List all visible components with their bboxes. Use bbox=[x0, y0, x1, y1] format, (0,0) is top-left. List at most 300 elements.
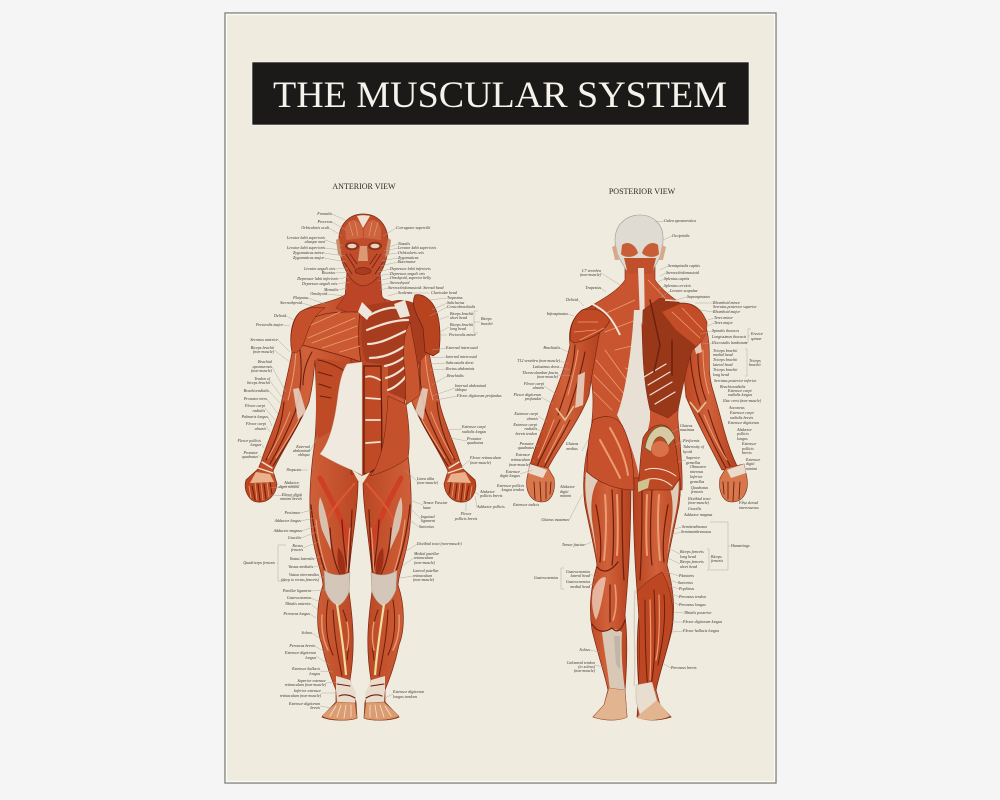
labels: anterior left: Peroneus brevis bbox=[288, 643, 315, 648]
labels: posterior left: Gastrocnemius bbox=[566, 569, 590, 574]
labels: anterior left: retinaculum (non-muscle) bbox=[280, 693, 322, 698]
labels: anterior right: pollicis brevis bbox=[479, 493, 503, 498]
labels: anterior right bbox=[388, 225, 505, 699]
abdominal tendon stripes bbox=[366, 376, 380, 443]
labels: anterior right: (non-muscle) bbox=[470, 460, 492, 465]
left shoulder deltoid bbox=[291, 307, 325, 353]
heading: posterior view: POSTERIOR VIEW bbox=[609, 187, 676, 196]
labels: anterior right: Subcostalis dorsi bbox=[446, 360, 473, 365]
labels: posterior right: brachii bbox=[749, 362, 761, 367]
labels: anterior left: Levator labii superioris bbox=[286, 235, 325, 240]
labels: anterior left: Frontalis bbox=[316, 211, 332, 216]
labels: posterior left: Gluteus bbox=[566, 441, 579, 446]
poster panel bbox=[225, 13, 776, 783]
leader lines bbox=[258, 214, 470, 470]
labels: posterior right bbox=[664, 218, 764, 670]
labels: anterior left: minimi brevis bbox=[280, 496, 302, 501]
labels: posterior right: First dorsal bbox=[738, 500, 759, 505]
labels: anterior left: Extensor digitorum bbox=[284, 650, 316, 655]
labels: posterior right: Adductor magnus bbox=[683, 512, 713, 517]
labels: posterior left: medial head bbox=[570, 584, 591, 589]
labels: posterior right: Occipitalis bbox=[672, 233, 690, 238]
labels: anterior right: Orbicularis oris bbox=[398, 250, 424, 255]
labels: anterior left: femoris bbox=[291, 547, 303, 552]
labels: posterior right: Teres minor bbox=[714, 315, 733, 320]
left arm bbox=[530, 305, 600, 468]
labels: posterior right: radialis longus bbox=[728, 392, 753, 397]
labels: anterior left: Quadriceps femoris bbox=[243, 560, 275, 565]
labels: posterior left: (non-muscle) bbox=[574, 668, 596, 673]
labels: posterior right: Extensor carpi bbox=[727, 388, 752, 393]
labels: posterior left: Extensor indicis bbox=[512, 502, 539, 507]
labels: anterior right: Inguinal bbox=[420, 514, 435, 519]
labels: anterior right: Internal intercostal bbox=[445, 354, 478, 359]
labels: anterior left: Pronator teres bbox=[243, 396, 267, 401]
labels: anterior right: Tensor Fasciae bbox=[423, 500, 448, 505]
labels: posterior right: Longissimus thoracis bbox=[711, 334, 747, 339]
labels: posterior right: Triceps brachii bbox=[713, 357, 737, 362]
labels: anterior right: Sartorius bbox=[419, 524, 434, 529]
labels: anterior left: biceps brachii bbox=[247, 380, 270, 385]
labels: anterior left: longus bbox=[250, 442, 261, 447]
labels: posterior right: Semimembranosus bbox=[681, 529, 711, 534]
labels: anterior left: Gracilis bbox=[288, 535, 301, 540]
labels: anterior right: External intercostal bbox=[445, 345, 479, 350]
groin shadow bbox=[352, 470, 370, 486]
labels: posterior right: Iliocostalis lumborum bbox=[711, 340, 747, 345]
labels: anterior left: retinaculum (non-muscle) bbox=[285, 682, 327, 687]
labels: anterior right: Depressor labii inferioris bbox=[389, 266, 431, 271]
labels: posterior left: brevis tendon bbox=[515, 431, 537, 436]
labels: anterior left: Brachioradialis bbox=[244, 388, 269, 393]
labels: anterior left: oblique bbox=[298, 452, 310, 457]
labels: posterior right: Inferior bbox=[689, 474, 703, 479]
labels: posterior right: pollicis bbox=[741, 446, 754, 451]
left rib and serratus muscles bbox=[316, 358, 362, 440]
labels: posterior right: Biceps femoris bbox=[680, 549, 704, 554]
labels: posterior left: longus tendon bbox=[501, 487, 524, 492]
labels: posterior right: Obturator bbox=[690, 464, 707, 469]
labels: anterior left: Pectoralis major bbox=[255, 322, 283, 327]
labels: posterior left: Deltoid bbox=[565, 297, 579, 302]
labels: posterior right: Extensor carpi bbox=[729, 410, 754, 415]
labels: posterior right: Galea aponeurotica bbox=[664, 218, 696, 223]
labels: anterior right: Iliotibial tract (non-muscle) bbox=[416, 541, 462, 546]
labels: posterior right: long head bbox=[680, 554, 697, 559]
labels: posterior left: Tensor fasciae bbox=[562, 542, 585, 547]
labels: posterior right: Splenius cervicis bbox=[664, 283, 691, 288]
labels: posterior right: Plantaris bbox=[678, 573, 694, 578]
labels: anterior left: radialis bbox=[253, 408, 265, 413]
labels: anterior left: aponeurosis bbox=[253, 364, 272, 369]
labels: anterior left: Inferior extensor bbox=[293, 688, 321, 693]
labels: posterior left: Latissimus dorsi bbox=[532, 364, 559, 369]
labels: posterior right: Superior bbox=[686, 455, 700, 460]
labels: anterior right: Corrugator supercilii bbox=[396, 225, 430, 230]
labels: anterior left: Flexor pollicis bbox=[237, 438, 261, 443]
labels: anterior left: Depressor labii inferioris bbox=[296, 276, 338, 281]
labels: posterior right: maximus bbox=[680, 427, 695, 432]
labels: anterior right: Rectus abdominis bbox=[445, 366, 475, 371]
labels: anterior left: Brachial bbox=[258, 359, 273, 364]
right back deep muscles bbox=[642, 298, 707, 418]
labels: anterior right: Clavicular head bbox=[431, 290, 458, 295]
labels: posterior right: Brachioradialis bbox=[720, 384, 746, 389]
labels: anterior right: pollicis brevis bbox=[454, 516, 478, 521]
labels: posterior right: Quadratus bbox=[691, 485, 709, 490]
labels: posterior left: ulnaris bbox=[527, 416, 538, 421]
labels: posterior right: Rhomboid major bbox=[712, 309, 740, 314]
labels: anterior left: Orbicularis oculi bbox=[301, 225, 329, 230]
right arm bbox=[680, 310, 738, 470]
labels: anterior left: (deep to rectus femoris) bbox=[281, 577, 320, 582]
labels: anterior left: longus bbox=[309, 671, 320, 676]
labels: posterior left: (non-muscle) bbox=[580, 272, 602, 277]
labels: posterior right: Extensor digitorum bbox=[727, 420, 759, 425]
labels: posterior left: Soleus bbox=[580, 647, 590, 652]
labels: anterior left: Serratus anterior bbox=[250, 337, 278, 342]
labels: posterior right: Tuberosity of bbox=[683, 444, 705, 449]
labels: anterior left: Palmaris longus bbox=[241, 414, 268, 419]
labels: anterior left: abdominal bbox=[293, 448, 311, 453]
labels: anterior right: Zygomaticus bbox=[398, 255, 419, 260]
labels: anterior left: Flexor carpi bbox=[245, 421, 266, 426]
left gluteus bbox=[587, 417, 634, 490]
labels: posterior left: Flexor carpi bbox=[523, 381, 544, 386]
left deltoid fibres bbox=[574, 322, 604, 340]
labels: posterior right: Hamstrings bbox=[730, 543, 750, 548]
labels: posterior right: Levator scapulae bbox=[669, 288, 698, 293]
labels: posterior right: Peroneus brevis bbox=[670, 665, 697, 670]
labels: anterior left: Vastus medialis bbox=[288, 564, 313, 569]
labels: anterior left: Extensor hallucis bbox=[291, 666, 320, 671]
labels: posterior right: Peroneus tendon bbox=[678, 594, 706, 599]
labels: anterior left: Mentalis bbox=[323, 287, 338, 292]
pectoral fibres bbox=[300, 312, 360, 352]
labels: anterior right: Lateral patellar bbox=[412, 568, 439, 573]
labels: anterior right: Levator labii superioris bbox=[397, 245, 436, 250]
labels: posterior left: Extensor bbox=[505, 469, 520, 474]
labels: anterior left: Extensor digitorum bbox=[288, 701, 320, 706]
labels: anterior right: Sternocleidomastoid: Sternal head bbox=[388, 285, 445, 290]
labels: posterior right: Sternocleidomastoid bbox=[666, 270, 700, 275]
white abdominal aponeurosis bbox=[320, 362, 362, 475]
labels: posterior left: (non-muscle) bbox=[537, 374, 559, 379]
labels: anterior left: Sternothyroid bbox=[280, 300, 303, 305]
labels: anterior right: long head bbox=[450, 326, 467, 331]
labels: posterior left: Gluteus maximus bbox=[541, 517, 569, 522]
labels: posterior right: Piriformis bbox=[682, 438, 700, 443]
labels: posterior left: ulnaris bbox=[533, 385, 544, 390]
rectus abdominis bbox=[364, 366, 382, 474]
right chest deep layer and ribs bbox=[358, 300, 430, 400]
labels: posterior right: Gluteus bbox=[680, 423, 693, 428]
right calf deep muscles bbox=[634, 572, 673, 720]
labels: posterior right: Triceps bbox=[749, 358, 761, 363]
labels: anterior right: ligament bbox=[421, 518, 436, 523]
labels: posterior right: Biceps femoris bbox=[680, 559, 704, 564]
labels: anterior right: Nasalis bbox=[397, 241, 410, 246]
labels: anterior left: Pronator bbox=[242, 450, 258, 455]
labels: posterior right: Teres major bbox=[714, 320, 733, 325]
labels: posterior left: profundus bbox=[524, 396, 541, 401]
labels: anterior left: Zygomaticus major bbox=[293, 255, 324, 260]
labels: anterior right: Flexor bbox=[460, 511, 472, 516]
labels: anterior left: Adductor magnus bbox=[273, 528, 302, 533]
labels: anterior left: Levator labii superioris bbox=[286, 245, 325, 250]
labels: posterior left bbox=[496, 268, 602, 673]
labels: anterior left: quadratus bbox=[242, 454, 258, 459]
left calf gastrocnemius and tendon bbox=[592, 562, 627, 720]
labels: anterior right: Linea alba bbox=[416, 476, 434, 481]
labels: anterior left: Tendon of bbox=[254, 376, 271, 381]
labels: posterior right: lateral head bbox=[713, 362, 733, 367]
labels: posterior right: gemellus bbox=[690, 479, 705, 484]
neck bbox=[336, 270, 390, 318]
labels: anterior right: oblique bbox=[455, 387, 467, 392]
labels: posterior left: (to soleus) bbox=[578, 664, 596, 669]
gluteus highlight bbox=[600, 428, 628, 478]
labels: anterior left: Tibialis anterior bbox=[285, 601, 311, 606]
title banner bbox=[252, 62, 749, 125]
labels: posterior right: (non-muscle) bbox=[688, 500, 710, 505]
labels: anterior right: latae bbox=[423, 505, 431, 510]
labels: anterior right: Omohyoid, superior belly bbox=[390, 275, 431, 281]
neck central tendon bbox=[638, 268, 645, 330]
labels: posterior right: Flexor hallucis longus bbox=[682, 628, 719, 633]
labels: anterior right: (non-muscle) bbox=[414, 560, 436, 565]
body halves and limbs bbox=[245, 276, 476, 720]
labels: anterior left: longus bbox=[305, 655, 316, 660]
labels: posterior right: hyoid bbox=[683, 449, 693, 454]
labels: posterior right: Sartorius bbox=[678, 580, 693, 585]
labels: anterior left: ulnaris bbox=[255, 426, 266, 431]
right deep gluteal flap bbox=[638, 425, 680, 492]
labels: anterior right: Adductor pollicis bbox=[476, 504, 505, 509]
labels: posterior left: Trapezius bbox=[585, 285, 601, 290]
labels: anterior left: (non-muscle) bbox=[251, 368, 273, 373]
labels: posterior right: Triceps brachii bbox=[713, 367, 737, 372]
labels: posterior left: retinaculum bbox=[511, 457, 530, 462]
hands bbox=[527, 464, 747, 502]
labels: anterior left: Deltoid bbox=[273, 313, 287, 318]
labels: anterior right: Flexor retinaculum bbox=[469, 455, 501, 460]
labels: anterior left: Levator anguli oris bbox=[303, 266, 335, 271]
labels: anterior left bbox=[237, 211, 338, 710]
labels: posterior right: longus bbox=[737, 436, 748, 441]
labels: posterior left: minimi bbox=[560, 493, 571, 498]
labels: posterior right: Peroneus longus bbox=[678, 602, 706, 607]
labels: posterior right: gemellus bbox=[686, 460, 701, 465]
labels: anterior right: longus tendons bbox=[393, 694, 418, 699]
labels: anterior left: Procerus bbox=[316, 219, 332, 224]
labels: anterior right: Scalenes bbox=[398, 290, 412, 295]
labels: anterior left: Zygomaticus minor bbox=[293, 250, 324, 255]
labels: anterior right: Coracobrachialis bbox=[447, 304, 476, 309]
labels: posterior right: Splenius capitis bbox=[664, 276, 690, 281]
labels: anterior left: Iliopsoas bbox=[285, 467, 301, 472]
labels: posterior left: quadratus bbox=[518, 445, 534, 450]
left back fibres bbox=[594, 280, 665, 410]
labels: anterior right: brachii bbox=[481, 321, 493, 326]
labels: anterior left: Peroneus longus bbox=[282, 611, 310, 616]
labels: posterior left: Thoracolumbar fascia bbox=[522, 370, 558, 375]
labels: anterior left: Gastrocnemius bbox=[287, 595, 311, 600]
labels: posterior right: long head bbox=[713, 372, 730, 377]
labels: anterior right: Medial patellar bbox=[413, 551, 439, 556]
labels: anterior right: Flexor digitorum profundus bbox=[456, 393, 502, 398]
labels: anterior right: Abductor bbox=[479, 489, 495, 494]
labels: anterior left: Pectineus bbox=[283, 510, 300, 515]
labels: anterior right: (non-muscle) bbox=[417, 480, 439, 485]
left pectoral and shoulder bbox=[302, 312, 361, 362]
labels: anterior right: Brachialis bbox=[447, 373, 464, 378]
labels: anterior right: Depressor anguli oris bbox=[389, 271, 425, 276]
labels: posterior right: minimi bbox=[746, 466, 757, 471]
labels: anterior left: Abductor bbox=[283, 480, 299, 485]
labels: anterior left: Depressor anguli oris bbox=[301, 281, 337, 286]
labels: anterior right: Biceps brachii bbox=[450, 311, 473, 316]
labels: posterior right: Anconeus bbox=[728, 405, 745, 410]
torso base bbox=[582, 265, 695, 490]
labels: anterior right: (non-muscle) bbox=[413, 577, 435, 582]
labels: posterior right: Supraspinatus bbox=[687, 294, 710, 299]
figure: posterior body bbox=[527, 215, 747, 720]
labels: anterior right: Sternohyoid bbox=[390, 280, 410, 285]
labels: anterior right: Buccinator bbox=[398, 259, 416, 264]
labels: posterior right: Rhomboid minor bbox=[712, 300, 740, 305]
labels: posterior left: T12 vertebra (non-muscle) bbox=[517, 358, 561, 363]
labels: anterior right: Internal abdominal bbox=[454, 383, 487, 388]
labels: posterior left: Extensor pollicis bbox=[496, 483, 524, 488]
labels: anterior left: alaeque nasi bbox=[305, 239, 325, 244]
labels: posterior left: lateral head bbox=[571, 573, 591, 578]
labels: posterior right: Extensor bbox=[741, 441, 757, 446]
labels: posterior left: digiti longus bbox=[500, 473, 520, 478]
head bbox=[612, 215, 666, 274]
labels: posterior right: Semitendinosus bbox=[682, 524, 707, 529]
inner white frame bbox=[226, 14, 774, 782]
labels: anterior right: retinaculum bbox=[414, 555, 433, 560]
labels: anterior left: Platysma bbox=[292, 295, 308, 300]
figure: anterior body bbox=[245, 214, 476, 720]
labels: posterior left: Brachialis bbox=[543, 345, 560, 350]
labels: anterior right: Biceps bbox=[481, 316, 492, 321]
labels: posterior right: medial head bbox=[713, 352, 734, 357]
labels: anterior left: Vastus intermedius bbox=[289, 572, 319, 577]
labels: anterior left: Vastus lateralis bbox=[289, 556, 314, 561]
labels: anterior right: radialis longus bbox=[462, 429, 487, 434]
head with facial muscles bbox=[336, 214, 391, 286]
labels: posterior left: digiti bbox=[560, 489, 568, 494]
labels: anterior left: Soleus bbox=[302, 630, 312, 635]
labels: posterior left: Extensor bbox=[515, 452, 530, 457]
labels: posterior left: Extensor carpi bbox=[513, 411, 538, 416]
labels: posterior right: internus bbox=[690, 469, 704, 474]
labels: posterior left: Flexor digitorum bbox=[513, 392, 541, 397]
spine and lumbar aponeurosis bbox=[617, 310, 650, 480]
labels: posterior right: Semispinalis capitis bbox=[668, 263, 700, 268]
labels: posterior right: radialis brevis bbox=[730, 415, 754, 420]
labels: posterior left: Gastrocnemius bbox=[566, 579, 590, 584]
labels: anterior right: Biceps brachii bbox=[450, 322, 473, 327]
right arm muscles bbox=[404, 322, 420, 405]
labels: anterior left: Flexor digiti bbox=[281, 492, 302, 497]
labels: posterior right: femoris bbox=[691, 489, 703, 494]
labels: anterior right: Pectoralis minor bbox=[448, 332, 476, 337]
labels: posterior left: Pronator bbox=[518, 441, 534, 446]
heading: anterior view: ANTERIOR VIEW bbox=[332, 182, 396, 191]
labels: posterior right: Abductor bbox=[736, 427, 752, 432]
labels: posterior right: pollicis bbox=[736, 431, 749, 436]
labels: posterior right: Serratus posterior inferior bbox=[714, 378, 757, 383]
left deltoid bbox=[570, 309, 610, 343]
labels: anterior left: Omohyoid bbox=[310, 291, 328, 296]
labels: posterior left: Calcaneal tendon bbox=[567, 660, 595, 665]
labels: posterior left: Infraspinatus bbox=[546, 311, 568, 316]
labels: posterior right: Spinalis thoracis bbox=[712, 328, 739, 333]
legs bbox=[584, 472, 680, 720]
labels: posterior right: Tibialis posterior bbox=[684, 610, 712, 615]
right external oblique bbox=[370, 396, 409, 476]
labels: posterior right: interosseous bbox=[739, 505, 759, 510]
labels: anterior left: brevis bbox=[310, 705, 320, 710]
labels: posterior right: Flexor digitorum longus bbox=[682, 619, 723, 624]
labels: posterior left: medius bbox=[566, 446, 578, 451]
labels: anterior right: Pronator bbox=[466, 436, 482, 441]
labels: posterior left: Gastrocnemius bbox=[534, 575, 558, 580]
labels: posterior right: Popliteus bbox=[678, 586, 695, 591]
scapular tendon bbox=[592, 304, 620, 335]
labels: posterior right: Triceps brachii bbox=[713, 348, 737, 353]
labels: posterior right: brevis bbox=[742, 450, 752, 455]
labels: anterior left: Risorius bbox=[321, 270, 335, 275]
labels: posterior left: Extensor carpi bbox=[512, 422, 537, 427]
labels: anterior right: Extensor carpi bbox=[461, 424, 486, 429]
labels: anterior left: Rectus bbox=[291, 543, 303, 548]
labels: anterior left: External bbox=[295, 444, 311, 449]
labels: posterior right: spinae bbox=[751, 336, 762, 341]
labels: anterior right: retinaculum bbox=[413, 573, 432, 578]
labels: anterior left: (non-muscle) bbox=[253, 349, 275, 354]
labels: posterior right: Erector bbox=[750, 331, 764, 336]
serratus shadow lines bbox=[318, 360, 346, 398]
labels: anterior left: Flexor carpi bbox=[244, 403, 265, 408]
labels: anterior left: Superior extensor bbox=[297, 678, 326, 683]
labels: posterior right: short head bbox=[680, 564, 698, 569]
right pectoral flap bbox=[413, 295, 440, 356]
labels: posterior right: Biceps bbox=[711, 554, 722, 559]
title banner: THE MUSCULAR SYSTEM bbox=[273, 75, 727, 116]
labels: posterior right: Iliac crest (non-muscle) bbox=[722, 398, 762, 403]
labels: anterior left: digiti minimi bbox=[278, 484, 299, 489]
labels: posterior left: Abductor bbox=[559, 484, 575, 489]
labels: posterior right: Serratus posterior superior bbox=[713, 304, 757, 309]
labels: anterior right: short head bbox=[450, 315, 468, 320]
labels: posterior right: digiti bbox=[746, 461, 754, 466]
labels: posterior right: femoris bbox=[711, 558, 723, 563]
labels: anterior right: Extensor digitorum bbox=[392, 689, 424, 694]
labels: posterior left: radialis bbox=[525, 426, 537, 431]
labels: posterior right: Iliotibial tract bbox=[687, 496, 711, 501]
labels: anterior left: Patellar ligament bbox=[282, 588, 312, 593]
labels: anterior right: quadratus bbox=[467, 440, 484, 445]
labels: anterior left: Biceps brachii bbox=[251, 345, 274, 350]
labels: anterior left: Adductor longus bbox=[273, 518, 301, 523]
labels: posterior right: Gracilis bbox=[688, 506, 702, 511]
labels: posterior left: (non-muscle) bbox=[509, 462, 531, 467]
labels: anterior right: Trapezius bbox=[447, 295, 463, 300]
